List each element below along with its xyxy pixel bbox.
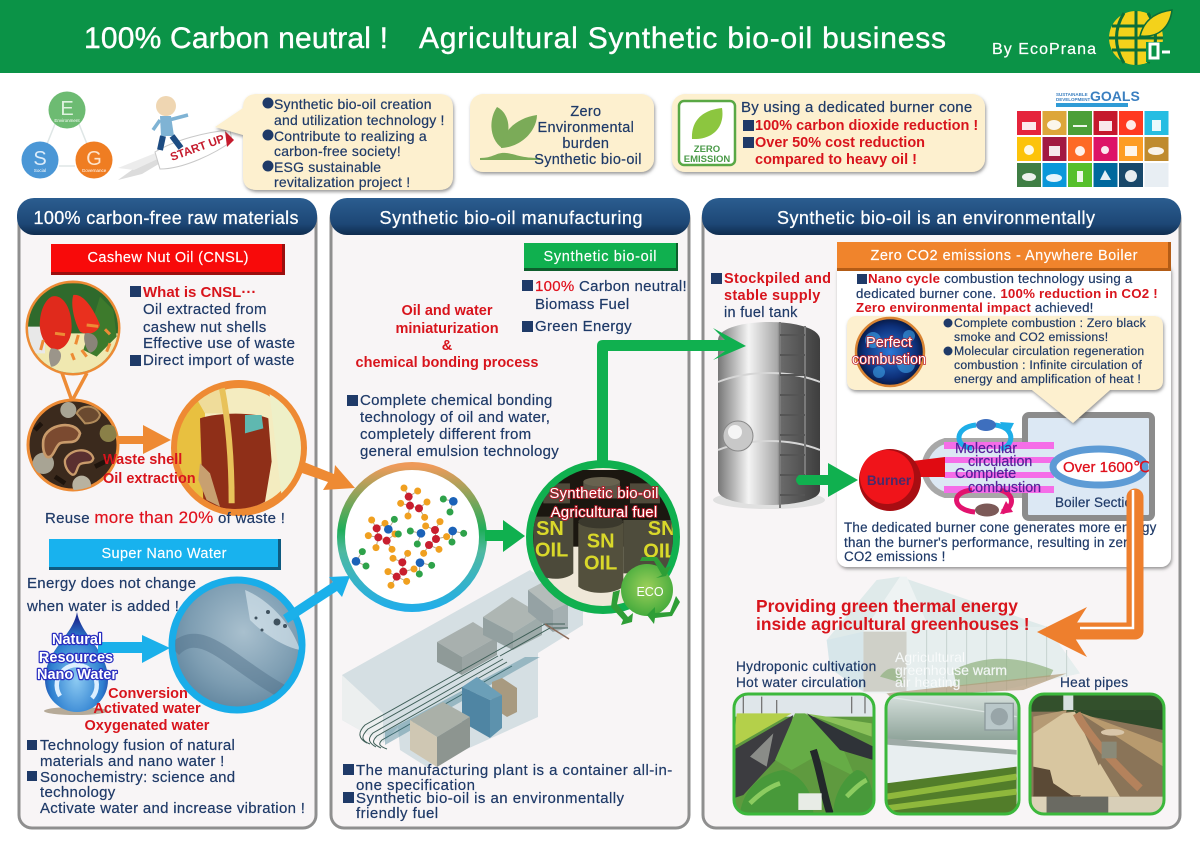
heading: green thermal energy: Providing green thermal energy	[756, 596, 1018, 616]
illustration: burner and boiler: Burner	[867, 473, 912, 488]
photo: waste shells	[28, 400, 118, 494]
panel: zero environmental burden: Zero	[570, 104, 601, 120]
text: nano cycle: dedicated burner cone.	[856, 286, 1000, 301]
panel: raw materials	[17, 198, 317, 828]
panel: environmentally	[702, 198, 1181, 828]
panel: zero emission burner cone: EMISSION	[684, 154, 730, 165]
arrow: drop to water	[98, 635, 170, 663]
illustration: burner and boiler: Boiler Section	[1055, 495, 1140, 510]
text: container plant notes: one specification	[356, 777, 475, 794]
label: natural resources nano water: Resources	[39, 650, 113, 666]
text: what is CNSL: Direct import of waste	[143, 352, 295, 369]
illustration: burner and boiler: combustion	[968, 480, 1041, 496]
callout: startup points: ESG sustainable	[274, 159, 381, 175]
title	[84, 22, 946, 55]
ESG diagram: E	[60, 98, 74, 120]
banner: Cashew Nut Oil	[51, 244, 285, 275]
text: carbon neutral biomass: Carbon neutral!	[575, 278, 687, 295]
callout: perfect combustion: Perfect	[866, 335, 912, 351]
icon: EcoPrana globe logo	[1109, 10, 1172, 65]
illustration: fuel tank	[713, 322, 825, 509]
labels: greenhouse systems: Hot water circulation	[736, 675, 866, 690]
text: energy does not change: when water is added !	[26, 598, 179, 615]
icon: SDG goals grid: DEVELOPMENT	[1056, 97, 1091, 102]
text: stockpiled: stable supply	[724, 288, 821, 304]
text: complete chemical bonding	[347, 392, 559, 460]
text: technology fusion: Activate water and increase vibration !	[40, 800, 305, 817]
icon: ECO recycle: ECO	[636, 585, 664, 599]
text: technology fusion: technology	[40, 784, 116, 801]
label: conversion: Conversion	[108, 686, 188, 702]
callout: startup points	[215, 94, 453, 190]
callout: startup points: revitalization project !	[274, 174, 410, 190]
text: energy does not change: Energy does not change	[27, 575, 196, 592]
callout: startup points: Synthetic bio-oil creation	[274, 96, 432, 112]
text: what is CNSL: Effective use of waste	[143, 335, 295, 352]
text: miniaturization: miniaturization	[395, 321, 499, 337]
molecule circle	[341, 466, 483, 608]
illustration: greenhouse background	[827, 577, 1080, 697]
panel: zero environmental burden: Environmental	[538, 120, 634, 136]
label: conversion: Activated water	[93, 701, 201, 717]
panel: zero environmental burden	[470, 94, 654, 172]
text: complete chemical bonding: completely different from	[360, 426, 531, 443]
text: nano cycle: Nano cycle	[868, 271, 940, 286]
title: 100% Carbon neutral !	[84, 22, 388, 55]
panel: zero emission burner cone	[672, 94, 985, 172]
heading: environmentally	[702, 198, 1181, 235]
text: technology fusion: materials and nano water !	[40, 753, 225, 770]
photo: heat pipes	[1028, 692, 1165, 814]
text: miniaturization: Oil and water	[401, 303, 493, 319]
photo: barrels: OIL	[535, 540, 568, 562]
label: waste shell oil extraction: Oil extraction	[103, 471, 196, 487]
text: dedicated burner cone: than the burner's performance, resulting in zero	[844, 535, 1136, 550]
text: nano cycle: 100% reduction in CO2 !	[1000, 286, 1158, 301]
icon: water drop	[44, 612, 108, 715]
text: what is CNSL: What is CNSL···	[143, 284, 256, 301]
photo: barrels: SN	[648, 518, 676, 540]
heading: environmentally: Synthetic bio-oil is an environmentally	[777, 208, 1095, 228]
label: conversion: Oxygenated water	[85, 718, 210, 734]
text: nano cycle: combustion technology using a	[940, 271, 1133, 286]
byline: By EcoPrana	[992, 41, 1096, 58]
photo: hydroponic	[733, 693, 875, 815]
label: agricultural air heating: air heating	[895, 674, 960, 690]
text: carbon neutral biomass: 100%	[535, 278, 575, 295]
callout: perfect combustion: Complete combustion : Zero black	[954, 316, 1147, 330]
label: agricultural air heating: Agricultural	[895, 649, 965, 665]
banner: synthetic bio-oil	[524, 243, 678, 271]
connector lines	[62, 373, 87, 401]
photo: warm air	[885, 693, 1020, 814]
text: what is CNSL: Oil extracted from	[143, 301, 267, 318]
ESG diagram	[22, 92, 112, 178]
text: carbon neutral biomass	[522, 278, 687, 335]
text: nano cycle: Zero environmental impact	[856, 300, 1031, 315]
text: dedicated burner cone: The dedicated burner cone generates more energy	[844, 520, 1157, 535]
text: nano cycle: achieved!	[1031, 300, 1094, 315]
callout: perfect combustion: combustion : Infinite circulation of	[954, 358, 1143, 372]
text: carbon neutral biomass: Biomass Fuel	[535, 296, 629, 313]
panel: zero environmental burden: Synthetic bio-oil	[534, 152, 642, 168]
text: complete chemical bonding: Complete chemical bonding	[360, 392, 553, 409]
photo: barrels: SN	[587, 530, 615, 552]
panel: zero emission burner cone: ZERO	[694, 144, 720, 155]
arrow: molecules to barrels	[485, 520, 525, 552]
illustration: burner and boiler: Complete	[955, 466, 1016, 482]
callout: startup points: Contribute to realizing a	[274, 128, 427, 144]
text: miniaturization: &	[442, 338, 453, 354]
banner: Cashew Nut Oil: Cashew Nut Oil (CNSL)	[88, 250, 248, 266]
callout: perfect combustion	[847, 316, 1163, 423]
panel: zero environmental burden: burden	[562, 136, 609, 152]
panel: zero emission burner cone: By using a dedicated burner cone	[741, 99, 972, 116]
panel: zero emission burner cone: 100% carbon dioxide reduction !	[755, 118, 978, 134]
ESG diagram: G	[86, 148, 102, 170]
heading: raw materials	[17, 198, 317, 235]
panel: zero emission burner cone: Over 50% cost reduction	[755, 135, 925, 151]
text: container plant notes: The manufacturing plant is a container all-in-	[356, 762, 673, 779]
arrow: bio oil to tank	[597, 328, 746, 464]
text: stockpiled: in fuel tank	[724, 305, 798, 321]
banner: anywhere boiler: Zero CO2 emissions - Anywhere Boiler	[870, 248, 1138, 264]
text: container plant notes	[343, 762, 673, 822]
rocket man START UP: START UP	[169, 133, 227, 164]
callout: perfect combustion: smoke and CO2 emissions!	[954, 330, 1108, 344]
arrow: heat to greenhouse	[1037, 490, 1135, 657]
callout: perfect combustion: combustion	[852, 352, 926, 368]
text: reuse more than 20%: Reuse more than 20% of waste !	[45, 508, 285, 527]
text: miniaturization: chemical bonding process	[356, 355, 538, 371]
banner: Super Nano Water: Super Nano Water	[102, 546, 227, 562]
callout: perfect combustion: Molecular circulation regeneration	[954, 344, 1144, 358]
callout: startup points: and utilization technology !	[274, 112, 445, 128]
panel: manufacturing	[283, 198, 690, 828]
header bar	[0, 0, 1200, 73]
ESG diagram: S	[33, 148, 47, 170]
panel: zero emission burner cone: compared to heavy oil !	[755, 152, 917, 168]
label: synthetic bio-oil agricultural fuel: Agricultural fuel	[551, 504, 657, 521]
labels: greenhouse systems: Hydroponic cultivation	[736, 659, 877, 674]
icon: ECO recycle	[611, 557, 680, 625]
text: nano cycle	[856, 271, 1158, 315]
label: agricultural air heating: greenhouse warm	[895, 662, 1007, 678]
photo: nano water	[172, 580, 302, 710]
photo: barrels: OIL	[584, 552, 617, 574]
arrow: shell to oil	[118, 425, 171, 454]
illustration: burner and boiler: Over 1600℃	[1063, 459, 1150, 476]
arrow: oil to molecules	[299, 462, 355, 490]
text: carbon neutral biomass: Green Energy	[535, 318, 632, 335]
illustration: container plant	[342, 570, 583, 767]
title: Agricultural Synthetic bio-oil business	[419, 22, 946, 55]
text: technology fusion	[27, 737, 305, 817]
label: heat pipes: Heat pipes	[1060, 675, 1128, 690]
text: container plant notes: friendly fuel	[356, 805, 439, 822]
heading: raw materials: 100% carbon-free raw materials	[34, 208, 298, 228]
text: dedicated burner cone: CO2 emissions !	[844, 549, 946, 564]
icon: SDG goals grid: GOALS	[1090, 88, 1140, 104]
label: natural resources nano water: Nano Water	[37, 667, 117, 683]
illustration: burner and boiler	[859, 415, 1152, 518]
arrow: water to molecules	[283, 576, 350, 623]
ESG diagram: Environment	[54, 118, 80, 123]
text: stockpiled: Stockpiled and	[724, 271, 831, 287]
banner: Super Nano Water	[49, 539, 281, 570]
text: technology fusion: Technology fusion of natural	[40, 737, 235, 754]
label: synthetic bio-oil agricultural fuel: Synthetic bio-oil	[549, 485, 659, 502]
photo: oil extraction	[175, 383, 303, 513]
icon: SDG goals grid: SUSTAINABLE	[1056, 92, 1088, 97]
card: anywhere boiler	[837, 242, 1171, 567]
text: what is CNSL	[130, 284, 295, 369]
text: complete chemical bonding: technology of oil and water,	[360, 409, 550, 426]
illustration: burner and boiler: Molecular	[955, 441, 1017, 457]
photo: cashew fruit	[25, 282, 122, 377]
ESG diagram: Social	[34, 168, 46, 173]
label: natural resources nano water: Natural	[52, 632, 102, 648]
label: waste shell oil extraction: Waste shell	[103, 452, 182, 468]
banner: synthetic bio-oil: Synthetic bio-oil	[544, 249, 656, 265]
rocket man START UP	[118, 96, 234, 180]
text: technology fusion: Sonochemistry: science and	[40, 769, 235, 786]
text: stockpiled	[711, 271, 831, 321]
photo: barrels	[530, 464, 680, 610]
photo: barrels: SN	[536, 518, 564, 540]
ESG diagram: Governance	[82, 168, 107, 173]
text: complete chemical bonding: general emulsion technology	[360, 443, 559, 460]
callout: startup points: carbon-free society!	[274, 143, 401, 159]
heading: green thermal energy: inside agricultural greenhouses !	[756, 614, 1030, 634]
heading: manufacturing	[330, 198, 690, 235]
arrow: tank to burner	[796, 463, 858, 497]
illustration: burner and boiler: circulation	[968, 454, 1032, 470]
icon: SDG goals grid	[1017, 88, 1168, 187]
heading: manufacturing: Synthetic bio-oil manufacturing	[380, 208, 642, 228]
photo: barrels: OIL	[643, 540, 677, 562]
banner: anywhere boiler	[837, 242, 1171, 271]
text: container plant notes: Synthetic bio-oil is an environmentally	[356, 790, 625, 807]
text: what is CNSL: cashew nut shells	[143, 319, 266, 336]
callout: perfect combustion: energy and amplification of heat !	[954, 372, 1141, 386]
